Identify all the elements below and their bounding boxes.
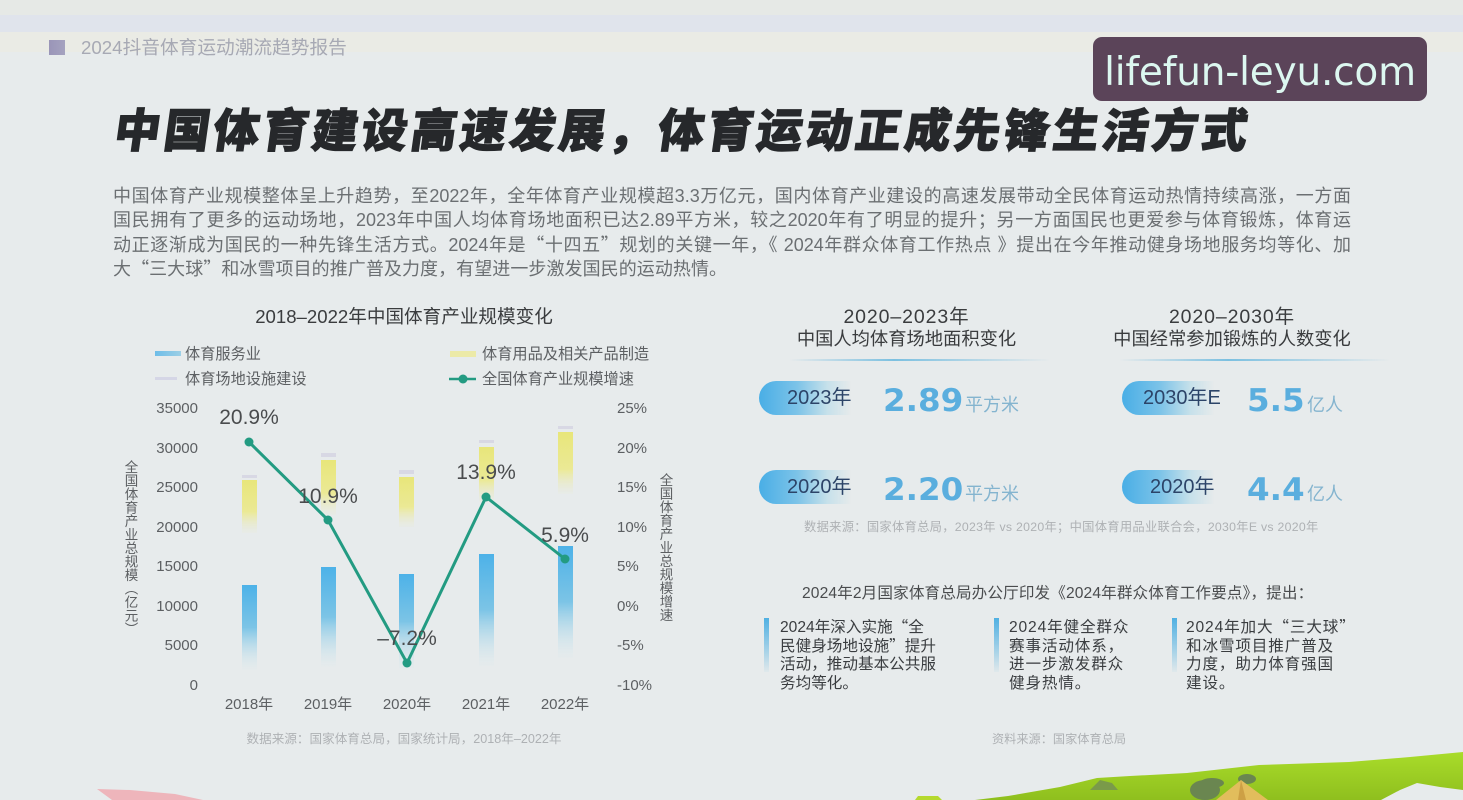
growth line (244, 438, 570, 668)
heading: 中国人均体育场地面积变化 (797, 328, 1016, 349)
text: 务均等化。 (780, 675, 858, 692)
text: 力度，助力体育强国 (1186, 656, 1334, 673)
row 2020: 平方米 (965, 484, 1019, 504)
text: 进一步激发群众 (1009, 656, 1124, 673)
data labels: 20.9% (219, 406, 279, 429)
legend: 体育用品及相关产品制造 (482, 346, 649, 363)
year labels: 2018年 (225, 696, 273, 713)
year labels: 2021年 (462, 696, 510, 713)
text: 建设。 (1186, 675, 1235, 692)
right axis labels: 10% (617, 519, 647, 536)
intro paragraph (113, 186, 1351, 281)
intro paragraph: 中国体育产业规模整体呈上升趋势，至2022年，全年体育产业规模超3.3万亿元，国内体育产业建设的高速发展带动全民体育运动热情持续高涨，一方面 (113, 186, 1351, 206)
year labels: 2022年 (541, 696, 589, 713)
icon: square marker (49, 40, 65, 55)
accent bar (994, 618, 999, 672)
text: 2024年加大“三大球” (1186, 615, 1356, 637)
text: 和冰雪项目推广普及 (1186, 638, 1334, 655)
chart source: 数据来源：国家体育总局，国家统计局，2018年–2022年 (247, 731, 561, 746)
policy point 2 (994, 618, 1129, 692)
text (780, 615, 936, 692)
report label (49, 37, 347, 58)
panel: sports area per capita (759, 306, 1040, 508)
right axis labels: 5% (617, 558, 639, 575)
data labels: –7.2% (377, 627, 437, 650)
row 2030: 亿人 (1307, 395, 1343, 415)
year labels: 2020年 (383, 696, 431, 713)
left axis labels: 10000 (156, 598, 198, 615)
left axis labels: 20000 (156, 519, 198, 536)
bars: services (242, 546, 573, 670)
left axis labels: 5000 (165, 637, 198, 654)
row 2030 (1122, 381, 1343, 419)
heading: 中国经常参加锻炼的人数变化 (1113, 328, 1351, 349)
divider (790, 359, 1050, 361)
text: 赛事活动体系， (1009, 638, 1124, 655)
row 2030: 2030年E (1143, 387, 1221, 409)
text: 2024年深入实施“全 (780, 615, 924, 637)
text: 民健身场地设施”提升 (780, 634, 936, 656)
heading: 2020–2023年 (843, 306, 970, 328)
row 2020 (1122, 470, 1343, 508)
bars: goods manufacturing (242, 432, 573, 533)
right axis labels: -5% (617, 637, 644, 654)
legend: 体育服务业 (185, 346, 261, 363)
accent bar (1172, 618, 1177, 672)
right axis labels: -10% (617, 677, 652, 694)
row 2020: 2020年 (787, 476, 852, 498)
left axis labels: 25000 (156, 479, 198, 496)
row 2030: 5.5 (1247, 383, 1305, 419)
heading (1113, 306, 1351, 349)
left axis labels: 15000 (156, 558, 198, 575)
data labels: 13.9% (456, 461, 516, 484)
row 2023: 2.89 (883, 383, 963, 419)
row 2023: 平方米 (965, 395, 1019, 415)
row 2020: 2.20 (883, 472, 963, 508)
row 2020: 2020年 (1150, 476, 1214, 498)
pink flag corner (97, 789, 203, 800)
accent bar (764, 618, 769, 672)
right axis title: 全国体育产业总规模增速 (658, 472, 673, 623)
title: 中国体育建设高速发展，体育运动正成先锋生活方式 (111, 105, 1255, 157)
bars: facilities (242, 426, 573, 478)
grass (915, 796, 942, 800)
right axis labels (617, 400, 652, 694)
left axis labels: 0 (190, 677, 198, 694)
right axis labels: 25% (617, 400, 647, 417)
row 2023: 2023年 (787, 387, 852, 409)
intro paragraph: 动正逐渐成为国民的一种先锋生活方式。2024年是“十四五”规划的关键一年，《 2024年群众体育工作热点 》提出在今年推动健身场地服务均等化、加 (113, 231, 1351, 257)
data labels (219, 406, 589, 650)
stats source: 数据来源：国家体育总局，2023年 vs 2020年；中国体育用品业联合会，2030年E vs 2020年 (804, 520, 1319, 534)
watermark badge (1093, 37, 1427, 101)
divider (1120, 359, 1390, 361)
year labels (225, 696, 589, 713)
trees (1190, 774, 1256, 800)
data labels: 5.9% (541, 524, 589, 547)
report name: 2024抖音体育运动潮流趋势报告 (81, 37, 347, 58)
text: 健身热情。 (1009, 675, 1091, 692)
watermark badge: lifefun-leyu.com (1104, 50, 1416, 95)
data labels: 10.9% (298, 485, 358, 508)
right axis labels: 15% (617, 479, 647, 496)
chart title: 2018–2022年中国体育产业规模变化 (255, 306, 553, 327)
policy heading: 2024年2月国家体育总局办公厅印发《2024年群众体育工作要点》，提出： (802, 585, 1313, 602)
header background bands (0, 0, 1463, 52)
row 2020: 亿人 (1307, 484, 1343, 504)
tent (1216, 780, 1268, 800)
year labels: 2019年 (304, 696, 352, 713)
policy point 3 (1172, 615, 1356, 692)
right axis labels: 20% (617, 440, 647, 457)
left axis labels (156, 400, 198, 694)
left axis labels: 30000 (156, 440, 198, 457)
text: 活动，推动基本公共服 (780, 656, 936, 673)
intro paragraph: 国民拥有了更多的运动场地，2023年中国人均体育场地面积已达2.89平方米，较之2020年有了明显的提升；另一方面国民也更爱参与体育锻炼，体育运 (113, 210, 1351, 230)
row 2020 (759, 470, 1019, 508)
heading (797, 306, 1016, 349)
intro paragraph: 大“三大球”和冰雪项目的推广普及力度，有望进一步激发国民的运动热情。 (113, 255, 727, 281)
policy source: 资料来源：国家体育总局 (992, 732, 1126, 746)
text (1009, 618, 1129, 692)
shadow hills (1090, 780, 1118, 790)
row 2020: 4.4 (1247, 472, 1305, 508)
text (1186, 615, 1356, 692)
illustration: grass, tent and flag (97, 752, 1463, 800)
left axis labels: 35000 (156, 400, 198, 417)
row 2023 (759, 381, 1019, 419)
heading: 2020–2030年 (1169, 306, 1295, 328)
panel: regular exercise population (1113, 306, 1379, 508)
text: 2024年健全群众 (1009, 619, 1129, 636)
legend: 体育场地设施建设 (185, 371, 306, 388)
left axis title: 全国体育产业总规模（亿元） (122, 459, 138, 636)
legend (155, 346, 649, 388)
legend: 全国体育产业规模增速 (482, 370, 634, 388)
policy point 1 (764, 615, 936, 692)
right axis labels: 0% (617, 598, 639, 615)
